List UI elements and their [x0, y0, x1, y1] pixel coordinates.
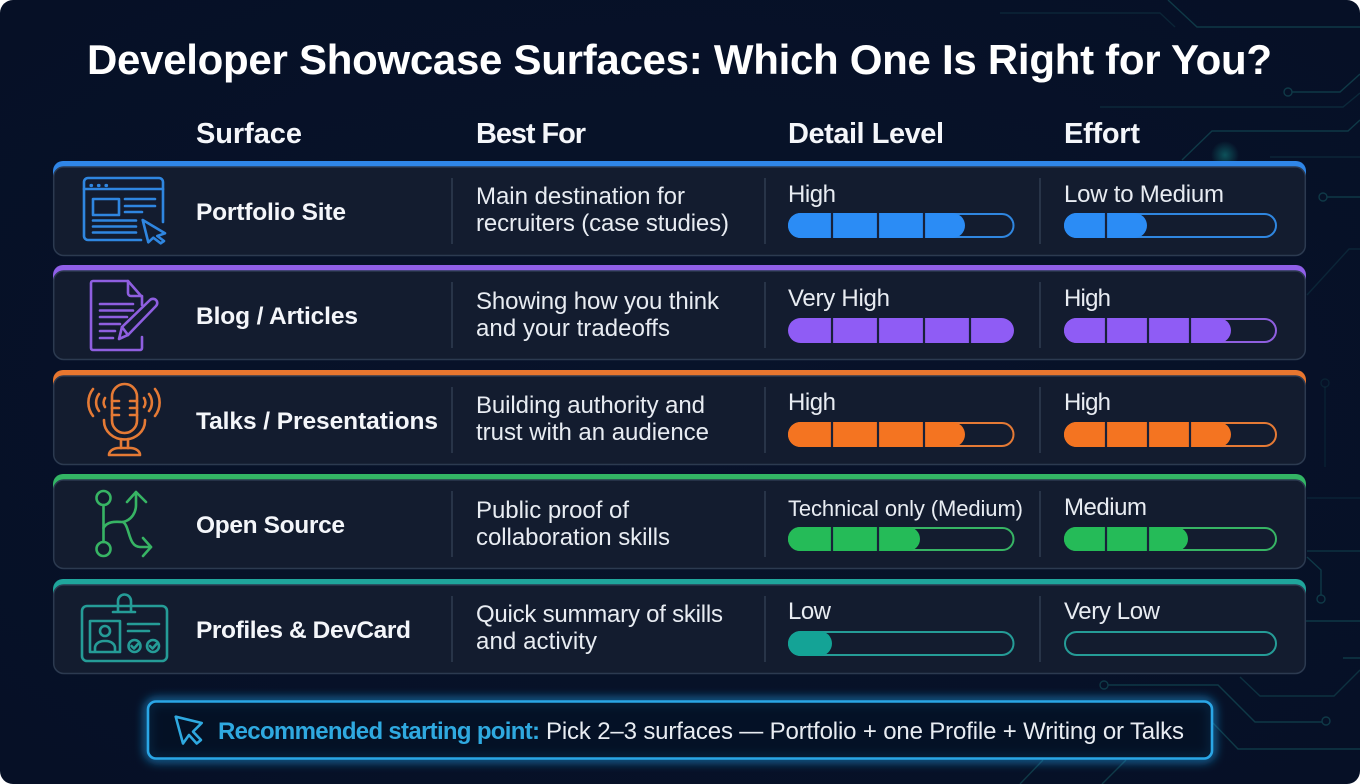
- effort bar: Very Low: [1064, 598, 1161, 625]
- effort bar: [1064, 285, 1276, 343]
- panel: Blog / Articles row: [53, 265, 1306, 360]
- recommendation text: [218, 718, 1184, 745]
- panel: Talks / Presentations row: [53, 370, 1306, 464]
- name: Blog / Articles: [196, 303, 358, 330]
- panel: Portfolio Site row: [53, 161, 1306, 256]
- name: Portfolio Site: [196, 199, 346, 226]
- best for: Quick summary of skills: [476, 601, 723, 628]
- best for: Public proof of: [476, 497, 629, 524]
- detail level bar: [788, 285, 1014, 343]
- detail level bar: [788, 496, 1023, 551]
- icon: microphone: [88, 384, 160, 455]
- icon: cursor: [176, 717, 202, 744]
- detail level bar: Very High: [788, 285, 890, 312]
- effort bar: [1064, 389, 1276, 447]
- effort bar: High: [1064, 389, 1111, 416]
- best for: and activity: [476, 628, 597, 655]
- best for: Building authority and: [476, 392, 705, 419]
- table header: Effort: [1064, 118, 1140, 150]
- name: Talks / Presentations: [196, 408, 438, 435]
- effort bar: [1064, 181, 1276, 238]
- panel: Open Source row: [53, 474, 1306, 568]
- title: Developer Showcase Surfaces: Which One Is Right for You?: [87, 36, 1272, 83]
- effort bar: [1064, 598, 1276, 655]
- best for: [476, 288, 720, 342]
- name: Open Source: [196, 512, 345, 539]
- best for: [476, 392, 709, 446]
- effort bar: [1064, 494, 1276, 551]
- best for: recruiters (case studies): [476, 210, 729, 237]
- detail level bar: Low: [788, 598, 832, 625]
- best for: trust with an audience: [476, 419, 709, 446]
- icon: document with pencil: [91, 281, 157, 350]
- table header: Best For: [476, 118, 586, 150]
- table header: [196, 118, 1140, 150]
- best for: collaboration skills: [476, 524, 670, 551]
- callout: recommended starting point: [148, 702, 1212, 758]
- best for: and your tradeoffs: [476, 315, 670, 342]
- table header: Detail Level: [788, 118, 944, 150]
- table header: Surface: [196, 118, 302, 150]
- recommendation text: Pick 2–3 surfaces — Portfolio + one Profile + Writing or Talks: [546, 718, 1184, 745]
- detail level bar: High: [788, 181, 836, 208]
- detail level bar: [788, 181, 1014, 238]
- effort bar: Medium: [1064, 494, 1147, 521]
- best for: [476, 497, 670, 551]
- effort bar: Low to Medium: [1064, 181, 1224, 208]
- best for: [476, 601, 723, 655]
- icon: git branch: [96, 491, 151, 556]
- effort bar: High: [1064, 285, 1111, 312]
- best for: Showing how you think: [476, 288, 720, 315]
- detail level bar: Technical only (Medium): [788, 496, 1023, 521]
- best for: [476, 183, 729, 237]
- recommendation text: Recommended starting point:: [218, 718, 540, 745]
- best for: Main destination for: [476, 183, 685, 210]
- detail level bar: High: [788, 389, 836, 416]
- name: Profiles & DevCard: [196, 617, 411, 644]
- detail level bar: [788, 598, 1014, 656]
- panel: Profiles & DevCard row: [53, 579, 1306, 674]
- detail level bar: [788, 389, 1014, 447]
- icon: ID badge: [82, 594, 167, 661]
- icon: browser window with cursor: [84, 178, 165, 243]
